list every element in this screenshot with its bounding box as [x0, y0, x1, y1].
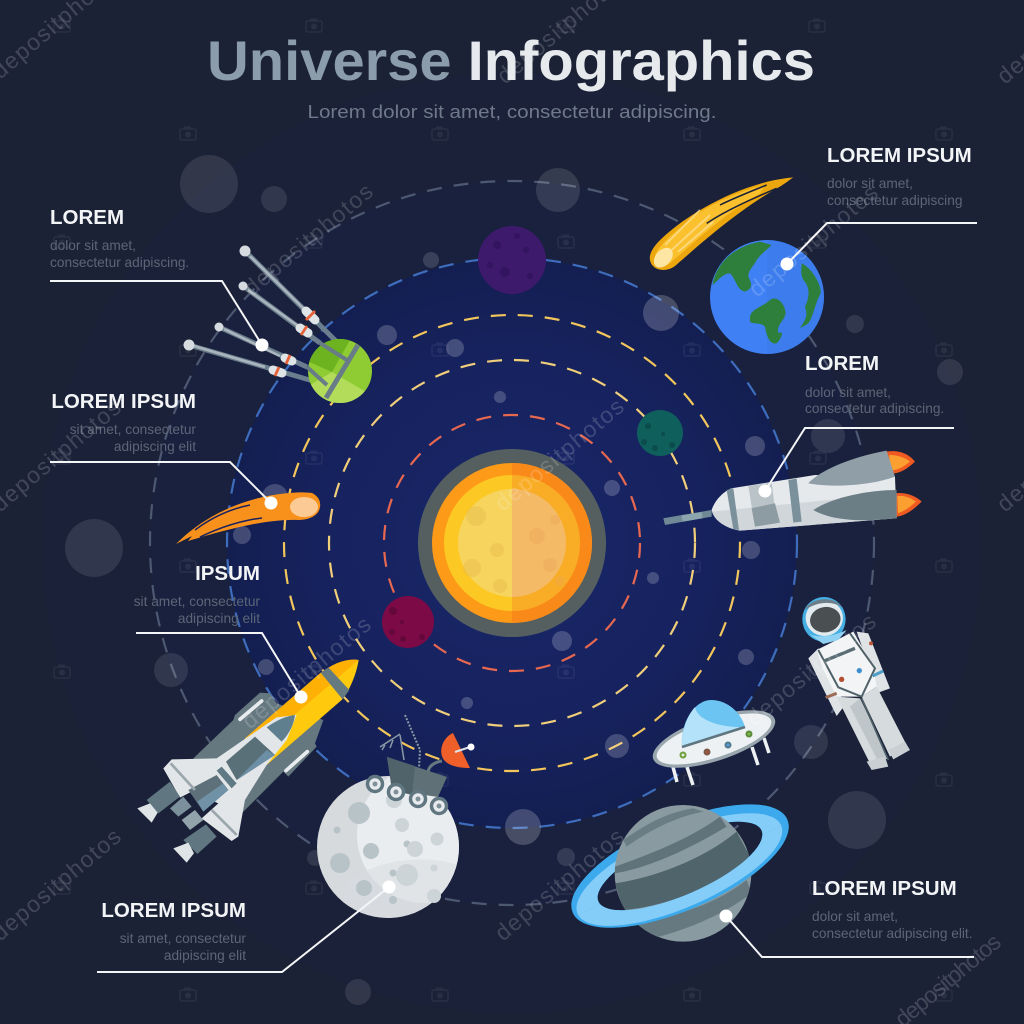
watermark text: depositphotos: [490, 823, 629, 946]
orbits: [150, 181, 874, 905]
callout: ipsum shuttle: IPSUM: [195, 562, 260, 585]
callout: lorem ipsum earth: [780, 144, 977, 270]
callout: ipsum shuttle: sit amet, consectetur: [134, 594, 260, 609]
callout: lorem rocket: [758, 352, 954, 498]
callout: lorem ipsum saturn: consectetur adipiscing elit.: [812, 926, 973, 941]
callout: lorem ipsum moon: LOREM IPSUM: [101, 899, 246, 922]
watermark text: depositphotos: [239, 178, 378, 301]
callout: lorem ipsum comet: [50, 390, 278, 510]
watermark text: depositphotos: [490, 393, 629, 516]
callout: lorem satellite: [50, 206, 268, 352]
callout: lorem ipsum moon: sit amet, consectetur: [120, 931, 246, 946]
planet: purple: [478, 226, 546, 294]
saturn: [571, 804, 789, 942]
planet: maroon: [382, 596, 434, 648]
ufo: [646, 698, 782, 785]
comet: orange: [176, 492, 320, 544]
satellite: [184, 246, 380, 410]
sun: [418, 449, 606, 637]
callout: lorem satellite: LOREM: [50, 206, 124, 229]
callout: lorem ipsum moon: [97, 880, 396, 972]
callout: lorem ipsum comet: LOREM IPSUM: [51, 390, 196, 413]
earth: [710, 240, 824, 354]
watermark text: depositphotos: [237, 611, 376, 734]
callout: lorem ipsum moon: adipiscing elit: [164, 948, 246, 963]
title: Universe Infographics: [207, 29, 815, 92]
callout: lorem rocket: consectetur adipiscing.: [805, 401, 944, 416]
rocket: [663, 451, 922, 531]
callout: lorem ipsum saturn: [720, 877, 974, 957]
watermark text: depositphotos: [744, 179, 883, 302]
watermark text: depositphotos: [742, 608, 881, 731]
callout: lorem ipsum saturn: LOREM IPSUM: [812, 877, 957, 900]
callout: lorem ipsum earth: consectetur adipiscing: [827, 193, 962, 208]
subtitle: Lorem dolor sit amet, consectetur adipiscing.: [308, 102, 716, 122]
callout: ipsum shuttle: adipiscing elit: [178, 611, 260, 626]
planet: teal: [637, 410, 683, 456]
comet: yellow: [650, 177, 793, 271]
callout: lorem rocket: LOREM: [805, 352, 879, 375]
shuttle: [137, 660, 359, 863]
callout: lorem ipsum earth: LOREM IPSUM: [827, 144, 972, 167]
callout: lorem rocket: dolor sit amet,: [805, 385, 891, 400]
moon with rover: [317, 715, 493, 930]
callout: lorem ipsum earth: dolor sit amet,: [827, 176, 913, 191]
callout: lorem satellite: consectetur adipiscing.: [50, 255, 189, 270]
callout: lorem ipsum saturn: dolor sit amet,: [812, 909, 898, 924]
callout: ipsum shuttle: [134, 562, 308, 704]
callout: lorem ipsum comet: adipiscing elit: [114, 439, 196, 454]
faint outer bubbles: [65, 155, 963, 1005]
callout: lorem ipsum comet: sit amet, consectetur: [70, 422, 196, 437]
inner bubbles: [233, 168, 765, 866]
callout: lorem satellite: dolor sit amet,: [50, 238, 136, 253]
astronaut: [802, 597, 910, 770]
